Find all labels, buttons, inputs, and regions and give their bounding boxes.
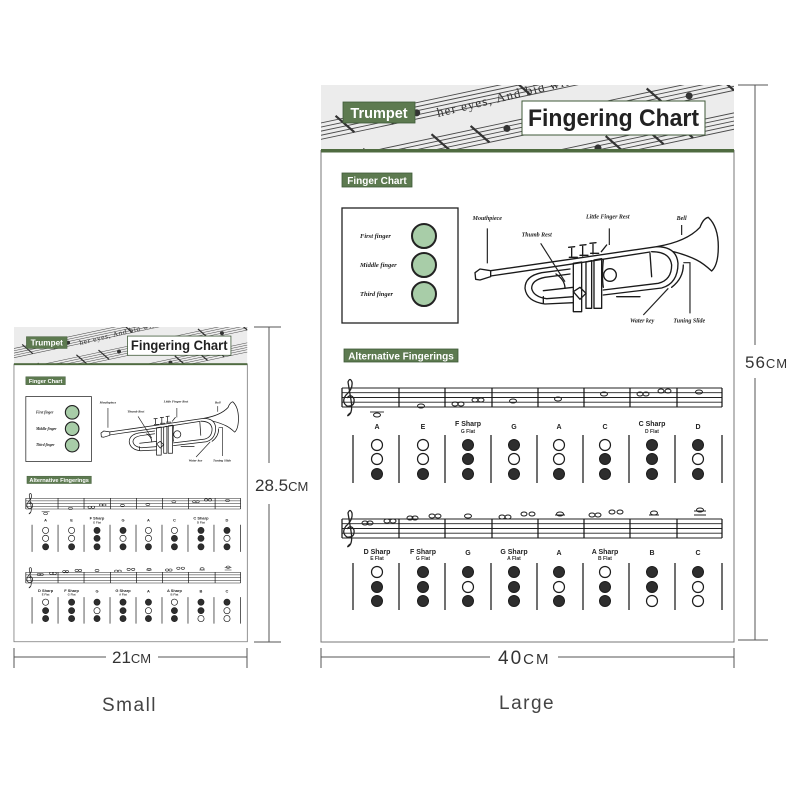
header band: sheet music background: her eyes, And bid with [435,72,578,120]
dimension: large height 56CM [738,85,788,640]
note labels: first row: D [226,517,229,522]
panel: finger legend: Third finger [360,291,394,298]
note labels: second row: B Flat [171,592,178,596]
badge: Finger Chart [342,173,412,187]
badge: Finger Chart: Finger Chart [347,176,407,187]
note labels: second row: A Flat [507,556,521,562]
header band: sheet music background [14,327,248,364]
note labels: second row: A [556,550,562,557]
badge: Alternative Fingerings: Alternative Fingerings [29,478,89,484]
note labels: second row [38,588,229,596]
header band: sheet music background: her eyes, And bid with [78,319,159,347]
dimension: small height 28.5CM [254,327,308,642]
note labels: second row: E Flat [370,556,384,562]
label: Large: Large [499,693,555,714]
poster outline [321,150,734,642]
note labels: first row: A [374,424,380,431]
note labels: first row: C Sharp [193,516,209,521]
note labels: second row: A [147,589,150,594]
note labels: second row: E Flat [42,592,49,596]
note labels: first row: E [70,517,73,522]
note labels: first row: A [556,424,562,431]
panel: finger legend: Third finger [36,443,55,447]
note labels: second row: B [649,550,655,557]
badge: Alternative Fingerings: Alternative Fingerings [348,352,454,362]
fingering diagrams: first row [32,525,241,552]
badge: Alternative Fingerings [27,476,91,484]
note labels: first row: E [421,424,426,431]
note labels: second row: D Sharp [364,549,390,556]
trumpet diagram: Tuning Slide [673,319,706,325]
title: Fingering Chart: Fingering Chart [528,105,699,132]
trumpet diagram: Thumb Rest [522,233,552,239]
poster outline [14,364,247,642]
panel: finger legend: Middle finger [359,262,397,269]
panel: large poster [320,85,734,642]
note labels: first row: G Flat [93,521,101,525]
trumpet diagram: Bell [676,216,687,222]
note labels: second row: B [200,589,203,594]
trumpet diagram: Thumb Rest [127,410,145,414]
note labels: second row: D Sharp [38,588,54,593]
note labels: second row: C [226,589,229,594]
dimension: large width 40CM [321,648,734,669]
note labels: first row [44,516,229,525]
note labels: second row: F Sharp [64,588,80,593]
title: Fingering Chart: Fingering Chart [131,338,228,353]
note labels: first row: C [173,517,176,522]
dimension: large height 56CM: 56CM [745,353,788,372]
note labels: first row: C [602,424,608,431]
panel: finger legend [342,208,458,323]
dimension: small width 21CM [14,648,247,668]
note labels: second row: A Sharp [167,588,182,593]
note labels: first row: D Flat [645,429,659,435]
fingering diagrams: second row [353,563,722,610]
fingering diagrams: first row [353,435,722,483]
note labels: first row [374,421,701,435]
note labels: second row: F Sharp [410,549,436,556]
fingering diagrams: second row [32,597,241,624]
badge: Finger Chart: Finger Chart [29,379,62,385]
note labels: first row: D [695,424,701,431]
note labels: first row: C Sharp [639,421,665,428]
dimension: small width 21CM: 21CM [112,648,151,667]
badge: Trumpet: Trumpet [31,339,63,348]
trumpet diagram: Little Finger Rest [585,215,630,221]
trumpet diagram [99,400,238,462]
note labels: second row: G [465,550,471,557]
note labels: second row [364,549,701,562]
trumpet diagram: Mouthpiece [472,216,502,222]
badge: Trumpet [343,102,415,123]
dimension: large width 40CM: 40CM [498,648,550,669]
trumpet diagram: Tuning Slide [213,458,231,462]
staff: first row [342,380,722,417]
dimension: small height 28.5CM: 28.5CM [255,476,308,495]
badge: Trumpet: Trumpet [350,106,408,122]
header rule [14,363,247,365]
trumpet diagram: Bell [214,400,221,404]
badge: Finger Chart [26,377,65,385]
label: Small: Small [102,695,157,716]
note labels: second row: G [95,589,99,594]
panel: finger legend: First finger [360,233,391,240]
note labels: second row: A Sharp [592,549,618,556]
staff: second row [342,508,722,547]
note labels: second row: C [695,550,701,557]
note labels: second row: G Sharp [500,549,528,556]
badge: Trumpet [26,337,67,348]
note labels: first row: A [147,517,150,522]
trumpet diagram: Water key [630,319,655,325]
panel: finger legend: Middle finger [35,427,57,431]
note labels: first row: F Sharp [455,421,481,428]
note labels: first row: D Flat [197,521,205,525]
note labels: second row: B Flat [598,556,612,562]
note labels: second row: G Flat [416,556,430,562]
note labels: first row: F Sharp [90,516,105,521]
note labels: first row: A [44,517,47,522]
panel: finger legend [26,397,91,461]
note labels: second row: G Flat [68,592,76,596]
note labels: second row: G Sharp [115,588,131,593]
trumpet diagram: Water key [189,458,203,462]
trumpet diagram: Little Finger Rest [163,400,189,404]
note labels: first row: G [121,517,125,522]
note labels: first row: G [511,424,517,431]
note labels: first row: G Flat [461,429,475,435]
staff: second row [26,566,241,588]
trumpet diagram [472,215,718,325]
header band: sheet music background [321,85,734,149]
note labels: second row: A Flat [119,592,127,596]
panel: finger legend: First finger [36,410,54,414]
trumpet diagram: Mouthpiece [99,400,117,404]
staff: first row [26,493,241,515]
header rule [321,149,734,152]
panel: small poster [14,327,248,642]
